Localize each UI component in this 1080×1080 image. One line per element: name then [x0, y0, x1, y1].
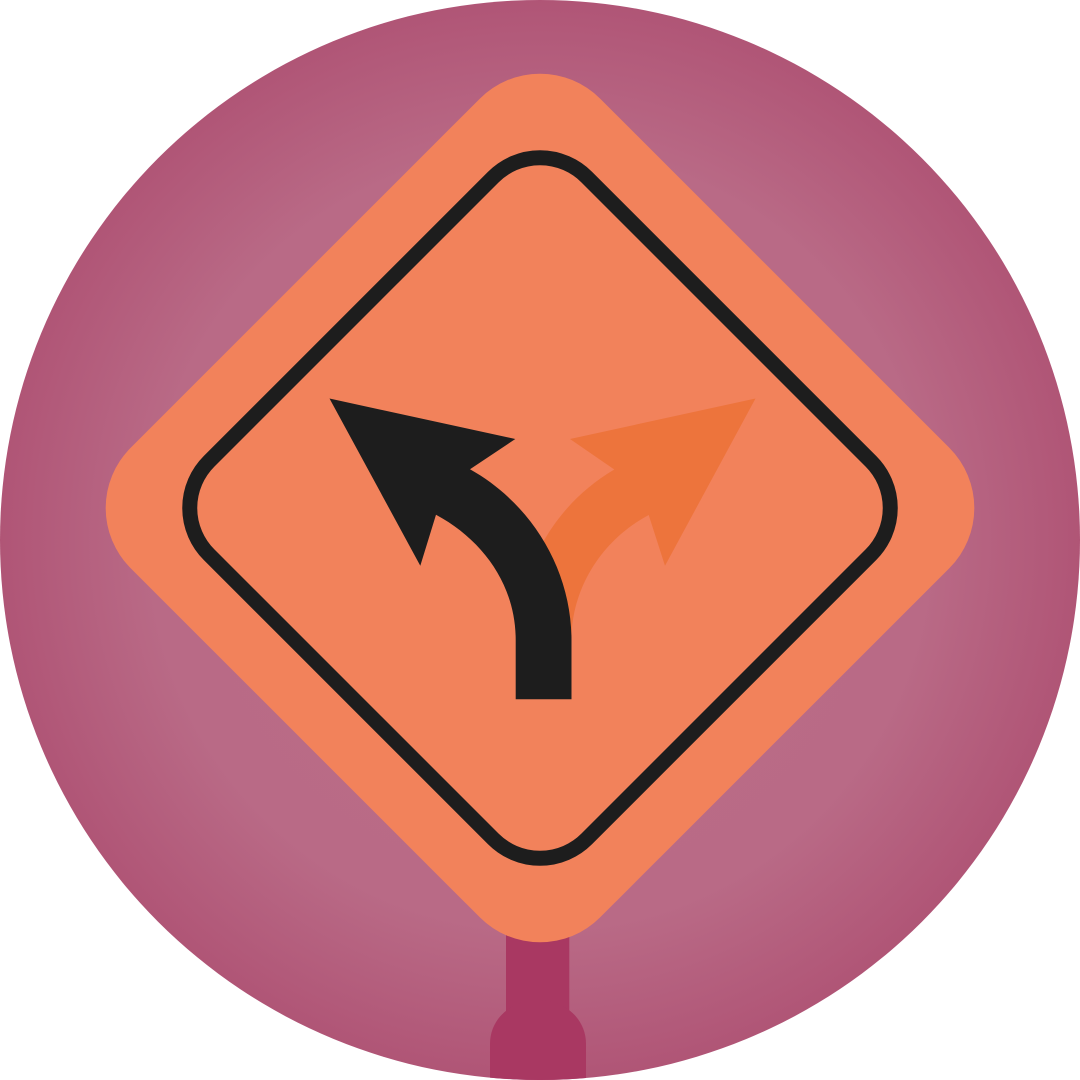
sign post	[490, 920, 586, 1080]
sign inner border	[162, 130, 918, 886]
arrow: black left turn	[330, 398, 572, 699]
diamond sign board	[70, 38, 1010, 978]
arrow: orange right branch	[541, 398, 756, 640]
